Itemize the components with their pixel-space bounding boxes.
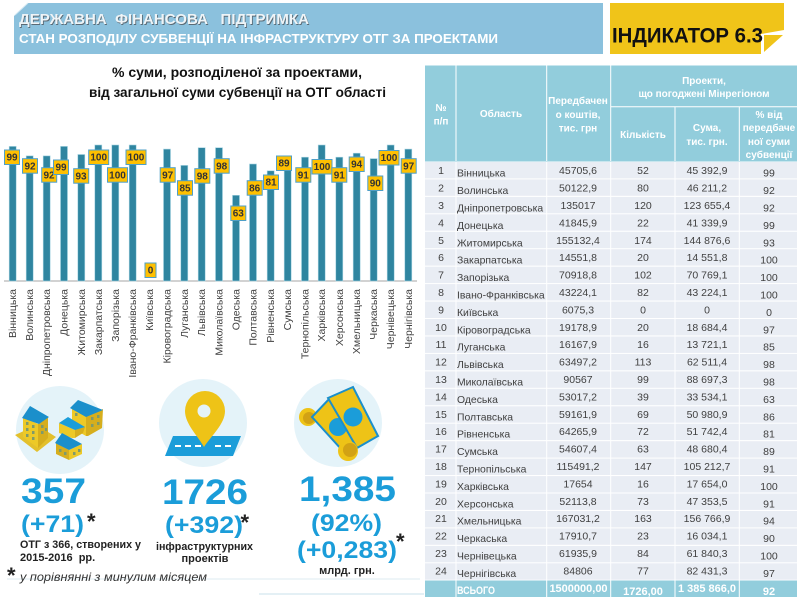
bar: Рівненська: 81 — [265, 178, 277, 189]
table header: тис. грн — [559, 124, 597, 134]
bar: Полтавська: Полтавська — [248, 289, 260, 346]
table row 13: Миколаївська — [457, 378, 523, 388]
table row 18: 105 212,7 — [684, 461, 731, 473]
table row 10: 97 — [763, 324, 775, 336]
table row 4: 99 — [763, 220, 775, 232]
bar: Кіровоградська: Кіровоградська — [162, 289, 174, 363]
icon: map pin on road — [159, 379, 247, 467]
bar: Одеська — [230, 195, 246, 330]
table row 7: Запорізька — [457, 273, 509, 284]
bar: Дніпропетровська: 92 — [43, 170, 55, 181]
table row 20: 20 — [435, 496, 447, 508]
table header: п/п — [434, 116, 448, 128]
table row 13: 99 — [637, 374, 649, 386]
bar: Рівненська — [264, 171, 278, 343]
table row 5: 5 — [438, 235, 444, 247]
table row 18: 18 — [435, 461, 447, 473]
table row 6 — [425, 249, 797, 267]
bar: Київська — [144, 263, 156, 331]
bar: Одеська: Одеська — [230, 289, 242, 330]
bar: Черкаська: 90 — [370, 179, 381, 190]
footnote: * — [7, 563, 16, 588]
table row 14 — [425, 389, 797, 406]
table row 11: 16 — [637, 339, 649, 351]
table row 18: 147 — [634, 461, 652, 473]
bar: Волинська: Волинська — [24, 289, 36, 341]
table row 8: Івано-Франківська — [457, 290, 545, 302]
table row 4: 41 339,9 — [687, 217, 728, 229]
table row 12: 98 — [763, 359, 775, 371]
indicator text: ІНДИКАТОР 6.3 — [612, 24, 763, 48]
table row 6: 100 — [760, 255, 778, 267]
stat caption: projects: проектів — [182, 553, 229, 565]
table row 2: Волинська — [457, 186, 508, 197]
bar: Волинська — [22, 156, 38, 341]
table header: № — [435, 103, 447, 114]
table row 24: 77 — [637, 565, 649, 577]
table row 15: 86 — [763, 411, 775, 423]
table row 23: 61 840,3 — [687, 548, 728, 560]
table row 22: 16 034,1 — [687, 531, 728, 543]
bar: Луганська — [178, 165, 192, 338]
bar: Полтавська — [247, 164, 262, 346]
table row 7: 102 — [634, 270, 652, 282]
table row 24: Чернігівська — [457, 569, 516, 580]
table row 14: 53017,2 — [559, 391, 597, 403]
table row 20: 73 — [637, 496, 649, 508]
bar: Запорізька: Запорізька — [110, 289, 122, 342]
bar: Чернігівська: 97 — [403, 161, 415, 172]
bar: Київська: 0 — [148, 266, 154, 277]
bar: Закарпатська — [89, 145, 109, 355]
chart title: % суми, розподіленої за проектами, — [112, 64, 362, 80]
footnote — [7, 563, 424, 594]
table row 6: Закарпатська — [457, 256, 523, 267]
table row 7: 70918,8 — [559, 270, 597, 282]
table row 6: 14551,8 — [559, 252, 597, 264]
table row 22: 17910,7 — [559, 531, 597, 543]
bar: Чернігівська — [401, 149, 416, 349]
table row 17 — [425, 441, 797, 458]
bar: Харківська: Харківська — [316, 289, 328, 341]
bar: Житомирська: Житомирська — [76, 289, 88, 355]
table row 16: 51 742,4 — [687, 426, 728, 438]
table row 14: 33 534,1 — [687, 391, 728, 403]
table row 13: 13 — [435, 374, 447, 386]
bar: Закарпатська: 100 — [90, 153, 107, 164]
table row 12: 62 511,4 — [687, 357, 727, 369]
bar: Вінницька: Вінницька — [7, 289, 19, 338]
table row 9: 0 — [704, 304, 710, 316]
bar: Вінницька — [4, 146, 20, 338]
table row 16 — [425, 424, 797, 441]
bar: Івано-Франківська — [126, 145, 146, 378]
table header: передбаче — [743, 122, 796, 134]
bar: Івано-Франківська: 100 — [128, 153, 145, 164]
table row 23 — [425, 546, 797, 562]
table row 15: 59161,9 — [559, 409, 597, 421]
table row 2 — [425, 179, 797, 197]
table row 16: 16 — [435, 426, 447, 438]
bar: Миколаївська: 98 — [216, 161, 228, 172]
table row 8: 43224,1 — [559, 287, 597, 299]
stat: projects — [156, 473, 254, 565]
bar: Херсонська: 91 — [334, 170, 345, 181]
table row 17: 63 — [637, 444, 649, 456]
stat: projects: 1726 — [162, 473, 248, 512]
table row 2: 80 — [637, 183, 649, 195]
bar chart — [4, 145, 417, 378]
table row 5: 155132,4 — [556, 235, 600, 247]
table row 13: 88 697,3 — [687, 374, 728, 386]
banner subtitle: СТАН РОЗПОДІЛУ СУБВЕНЦІЇ НА ІНФРАСТРУКТУРУ ОТГ ЗА ПРОЕКТАМИ — [19, 31, 498, 46]
bar: Запорізька — [108, 145, 128, 342]
table row 24: 97 — [763, 568, 775, 580]
table header: ної суми — [748, 137, 790, 148]
table row 15: Полтавська — [457, 412, 513, 423]
stat caption: funds: млрд. грн. — [319, 565, 375, 577]
table row 19: 16 — [637, 478, 649, 490]
table row 7 — [425, 267, 797, 284]
table row 10: 20 — [637, 322, 649, 334]
table row 16: 72 — [637, 426, 649, 438]
table row 19: 17 654,0 — [687, 478, 728, 490]
table row 17: 48 680,4 — [687, 444, 728, 456]
table row 3: 120 — [634, 200, 652, 212]
table row 24: 82 431,3 — [687, 565, 728, 577]
table row 8: 8 — [438, 287, 444, 299]
stat caption: communities: 2015-2016 рр. — [20, 552, 95, 564]
table row 4: 4 — [438, 217, 444, 229]
table row 19: 17654 — [563, 478, 593, 490]
table total row: 1 385 866,0 — [678, 583, 736, 595]
header banner — [14, 3, 603, 54]
bar: Вінницька: 99 — [6, 153, 18, 164]
table row 2: 2 — [438, 183, 444, 195]
footnote text: у порівнянні з минулим місяцем — [19, 570, 207, 584]
table row 22: 22 — [435, 531, 447, 543]
table row 7: 7 — [438, 270, 444, 282]
table row 12 — [425, 354, 797, 371]
stat: funds: 1,385 — [299, 470, 396, 509]
table row 2: 92 — [763, 185, 775, 197]
table row 6: 6 — [438, 252, 444, 264]
table row 10: Кіровоградська — [457, 325, 531, 336]
table row 21: Хмельницька — [457, 517, 522, 528]
bar: Сумська: Сумська — [282, 289, 294, 330]
bar: Кіровоградська — [160, 149, 175, 363]
bar: Рівненська: Рівненська — [265, 289, 277, 343]
table row 13: 98 — [763, 376, 775, 388]
bar: Тернопільська: Тернопільська — [300, 289, 312, 359]
bar: Чернівецька: Чернівецька — [385, 289, 397, 349]
stat: communities: (+71) — [21, 511, 84, 538]
table column separators — [456, 162, 739, 597]
bar: Донецька: 99 — [55, 163, 67, 174]
table row 3 — [425, 197, 797, 214]
table row 5: 144 876,6 — [684, 235, 731, 247]
table row 6: 20 — [637, 252, 649, 264]
bar: Закарпатська: Закарпатська — [93, 289, 105, 355]
bar: Хмельницька — [349, 153, 364, 354]
table row 9: 6075,3 — [562, 304, 594, 316]
table row 24 — [425, 563, 797, 580]
bar: Львівська: 98 — [197, 171, 208, 182]
table row 21 — [425, 511, 797, 528]
table row 10: 18 684,4 — [687, 322, 728, 334]
table header: Кількість — [620, 130, 666, 141]
table row 6: 14 551,8 — [687, 252, 728, 264]
table row 20: 52113,8 — [559, 496, 597, 508]
table row 9: 9 — [438, 304, 444, 316]
table row 14: 63 — [763, 394, 775, 406]
chart title — [89, 64, 386, 100]
stat: communities: * — [87, 509, 96, 534]
table row 4: 41845,9 — [559, 217, 597, 229]
table header: що погоджені Мінрегіоном — [638, 89, 770, 100]
table row 8: 100 — [760, 290, 778, 302]
table row 15: 15 — [435, 409, 447, 421]
table row 19: 19 — [435, 478, 447, 490]
table row 21: 163 — [634, 513, 652, 525]
table row 1: 1 — [438, 165, 444, 177]
table row 16: 64265,9 — [559, 426, 597, 438]
table row 19: 100 — [760, 481, 778, 493]
table row 10: 10 — [435, 322, 447, 334]
table row 24: 84806 — [563, 565, 593, 577]
bar: Житомирська — [74, 154, 89, 355]
table row 23: Чернівецька — [457, 552, 517, 562]
table row 11: 11 — [436, 339, 447, 351]
table row 24: 24 — [435, 565, 447, 577]
table row 3: 92 — [763, 202, 775, 214]
table row 1: 99 — [763, 168, 775, 180]
table row 23: 100 — [760, 550, 778, 562]
table row 1: Вінницька — [457, 169, 506, 180]
bar: Чернівецька: 100 — [381, 153, 398, 164]
table row 3: 3 — [438, 200, 444, 212]
bar: Миколаївська — [214, 148, 229, 356]
bar: Житомирська: 93 — [75, 171, 87, 182]
bar: Черкаська — [368, 159, 383, 340]
bar: Дніпропетровська — [41, 156, 57, 376]
table row 22: 23 — [637, 531, 649, 543]
table row 9: Київська — [457, 308, 499, 319]
bar: Сумська — [276, 156, 294, 330]
table total row — [425, 580, 797, 598]
bar: Хмельницька: Хмельницька — [351, 289, 363, 354]
table row 21: 156 766,9 — [684, 513, 731, 525]
bar: Харківська: 100 — [314, 162, 331, 173]
stat caption: communities: ОТГ з 366, створених у — [20, 539, 142, 551]
table row 16: Рівненська — [457, 430, 510, 441]
bar: Херсонська — [332, 157, 347, 346]
stat: communities: 357 — [21, 472, 86, 511]
bar: Херсонська: Херсонська — [334, 289, 346, 346]
icon: banknotes and coins — [294, 379, 382, 467]
table row 11: 13 721,1 — [687, 339, 728, 351]
table row 15 — [425, 406, 797, 423]
stat: funds: (92%) — [311, 510, 382, 537]
table header: о коштів, — [556, 110, 601, 121]
bar: Луганська: Луганська — [179, 289, 191, 338]
table row 18: Тернопільська — [457, 464, 527, 476]
bar: Львівська: Львівська — [196, 289, 208, 336]
table row 3: Дніпропетровська — [457, 204, 543, 214]
bar: Сумська: 89 — [278, 159, 290, 170]
bar: Луганська: 85 — [179, 183, 191, 194]
bar: Волинська: 92 — [24, 161, 36, 172]
table row 8 — [425, 284, 797, 302]
table row 1: 52 — [637, 165, 649, 177]
table row 22: 90 — [763, 533, 775, 545]
table row 17: 54607,4 — [559, 444, 597, 456]
table row 1: 45 392,9 — [687, 165, 728, 177]
table row 19: Харківська — [457, 482, 509, 493]
table header: Передбачен — [548, 95, 608, 107]
table row 12: Львівська — [457, 360, 504, 371]
table row 8: 43 224,1 — [687, 287, 728, 299]
bar: Тернопільська: 91 — [298, 170, 309, 181]
bar: Чернігівська: Чернігівська — [403, 289, 415, 349]
table row 17: 17 — [435, 444, 447, 456]
table row 23: 61935,9 — [559, 548, 597, 560]
table row 2: 46 211,2 — [687, 183, 727, 195]
table header: субвенції — [746, 149, 793, 161]
table row 21: 21 — [435, 513, 447, 525]
table row 23: 23 — [435, 548, 447, 560]
bar: Кіровоградська: 97 — [162, 170, 174, 181]
bar: Одеська: 63 — [233, 209, 244, 220]
banner title shadow: ДЕРЖАВНА ФІНАНСОВА ПІДТРИМКА — [20, 12, 310, 29]
stat: projects: * — [240, 510, 250, 535]
table row 9 — [425, 302, 797, 319]
table row 15: 50 980,9 — [687, 409, 728, 421]
table row 5: 93 — [763, 237, 775, 249]
indicator badge — [610, 3, 784, 54]
table header: тис. грн. — [686, 137, 728, 148]
stat: funds — [297, 470, 405, 577]
table row 13: 90567 — [563, 374, 593, 386]
table row 23: 84 — [637, 548, 649, 560]
table total row: 1726,00 — [623, 586, 663, 598]
table row 16: 81 — [763, 429, 775, 441]
table row 3: 135017 — [560, 200, 596, 212]
table row 22 — [425, 528, 797, 545]
table row 5: Житомирська — [457, 238, 523, 249]
table row 9: 0 — [766, 307, 772, 319]
bar: Донецька — [54, 146, 70, 336]
table row 21: 167031,2 — [556, 513, 600, 525]
table row 18 — [425, 459, 797, 476]
table row 8: 82 — [637, 287, 649, 299]
table row 20: Херсонська — [457, 499, 514, 510]
table row 1: 45705,6 — [559, 165, 597, 177]
table row 13 — [425, 371, 797, 388]
bar: Тернопільська — [296, 157, 312, 359]
bar: Харківська — [312, 145, 332, 341]
table row 9: 0 — [640, 304, 646, 316]
table row 21: 94 — [763, 516, 775, 528]
bar: Львівська — [195, 148, 210, 336]
table row 4: Донецька — [457, 221, 504, 232]
bar: Полтавська: 86 — [249, 183, 261, 194]
table header: Проекти, — [682, 76, 726, 87]
table row 2: 50122,9 — [559, 183, 597, 195]
table row 10 — [425, 319, 797, 336]
bar: Івано-Франківська: Івано-Франківська — [127, 289, 139, 378]
table row 4: 22 — [637, 217, 649, 229]
table row 5 — [425, 232, 797, 249]
table row 5: 174 — [634, 235, 652, 247]
table total row: ВСЬОГО — [457, 585, 495, 597]
chart title: від загальної суми субвенції на ОТГ області — [89, 84, 386, 100]
table row 3: 123 655,4 — [684, 200, 731, 212]
table header: % від — [756, 110, 783, 121]
stat caption: projects: інфраструктурних — [156, 541, 254, 553]
table row 12: 12 — [435, 357, 447, 369]
table row 11: 16167,9 — [559, 339, 597, 351]
stat: funds: (+0,283) — [297, 537, 397, 564]
table total row: 1500000,00 — [549, 583, 608, 595]
table row 14: Одеська — [457, 395, 498, 406]
table row 20: 47 353,5 — [687, 496, 728, 508]
table row 18: 115491,2 — [556, 461, 600, 473]
table row 12: 113 — [635, 357, 652, 369]
table row 14: 14 — [435, 391, 447, 403]
bar: Хмельницька: 94 — [351, 160, 363, 171]
table total row: 92 — [763, 586, 775, 598]
table row 11: 85 — [763, 342, 775, 354]
table row 12: 63497,2 — [559, 357, 597, 369]
table row 15: 69 — [637, 409, 649, 421]
table row 19 — [425, 476, 797, 493]
stat: funds: * — [396, 529, 405, 554]
bar: Київська: Київська — [144, 289, 156, 331]
bar: Черкаська: Черкаська — [368, 289, 380, 340]
table row 7: 70 769,1 — [687, 270, 728, 282]
table row 20 — [425, 494, 797, 510]
table row 4 — [425, 214, 797, 232]
data table — [425, 65, 797, 598]
table row 11 — [425, 336, 797, 354]
icon: houses — [15, 386, 104, 474]
table row 10: 19178,9 — [559, 322, 597, 334]
table row 7: 100 — [760, 272, 778, 284]
table row 14: 39 — [637, 391, 649, 403]
bar: Донецька: Донецька — [58, 289, 70, 336]
stat: communities — [20, 472, 142, 564]
bar: Миколаївська: Миколаївська — [214, 289, 226, 356]
table header: Сума, — [693, 123, 721, 134]
bar: Дніпропетровська: Дніпропетровська — [41, 289, 53, 376]
table row 18: 91 — [763, 464, 775, 476]
table row 17: 89 — [763, 446, 775, 458]
banner title: ДЕРЖАВНА ФІНАНСОВА ПІДТРИМКА — [19, 11, 309, 28]
stat: projects: (+392) — [165, 512, 243, 539]
bar: Запорізька: 100 — [109, 170, 126, 181]
table row 20: 91 — [763, 498, 775, 510]
table header: Область — [480, 108, 522, 120]
table row 11: Луганська — [457, 343, 506, 354]
table header — [425, 65, 797, 162]
table row 1 — [425, 162, 797, 180]
table row 17: Сумська — [457, 447, 498, 458]
bar: Чернівецька — [379, 145, 399, 349]
table row 22: Черкаська — [457, 534, 507, 545]
